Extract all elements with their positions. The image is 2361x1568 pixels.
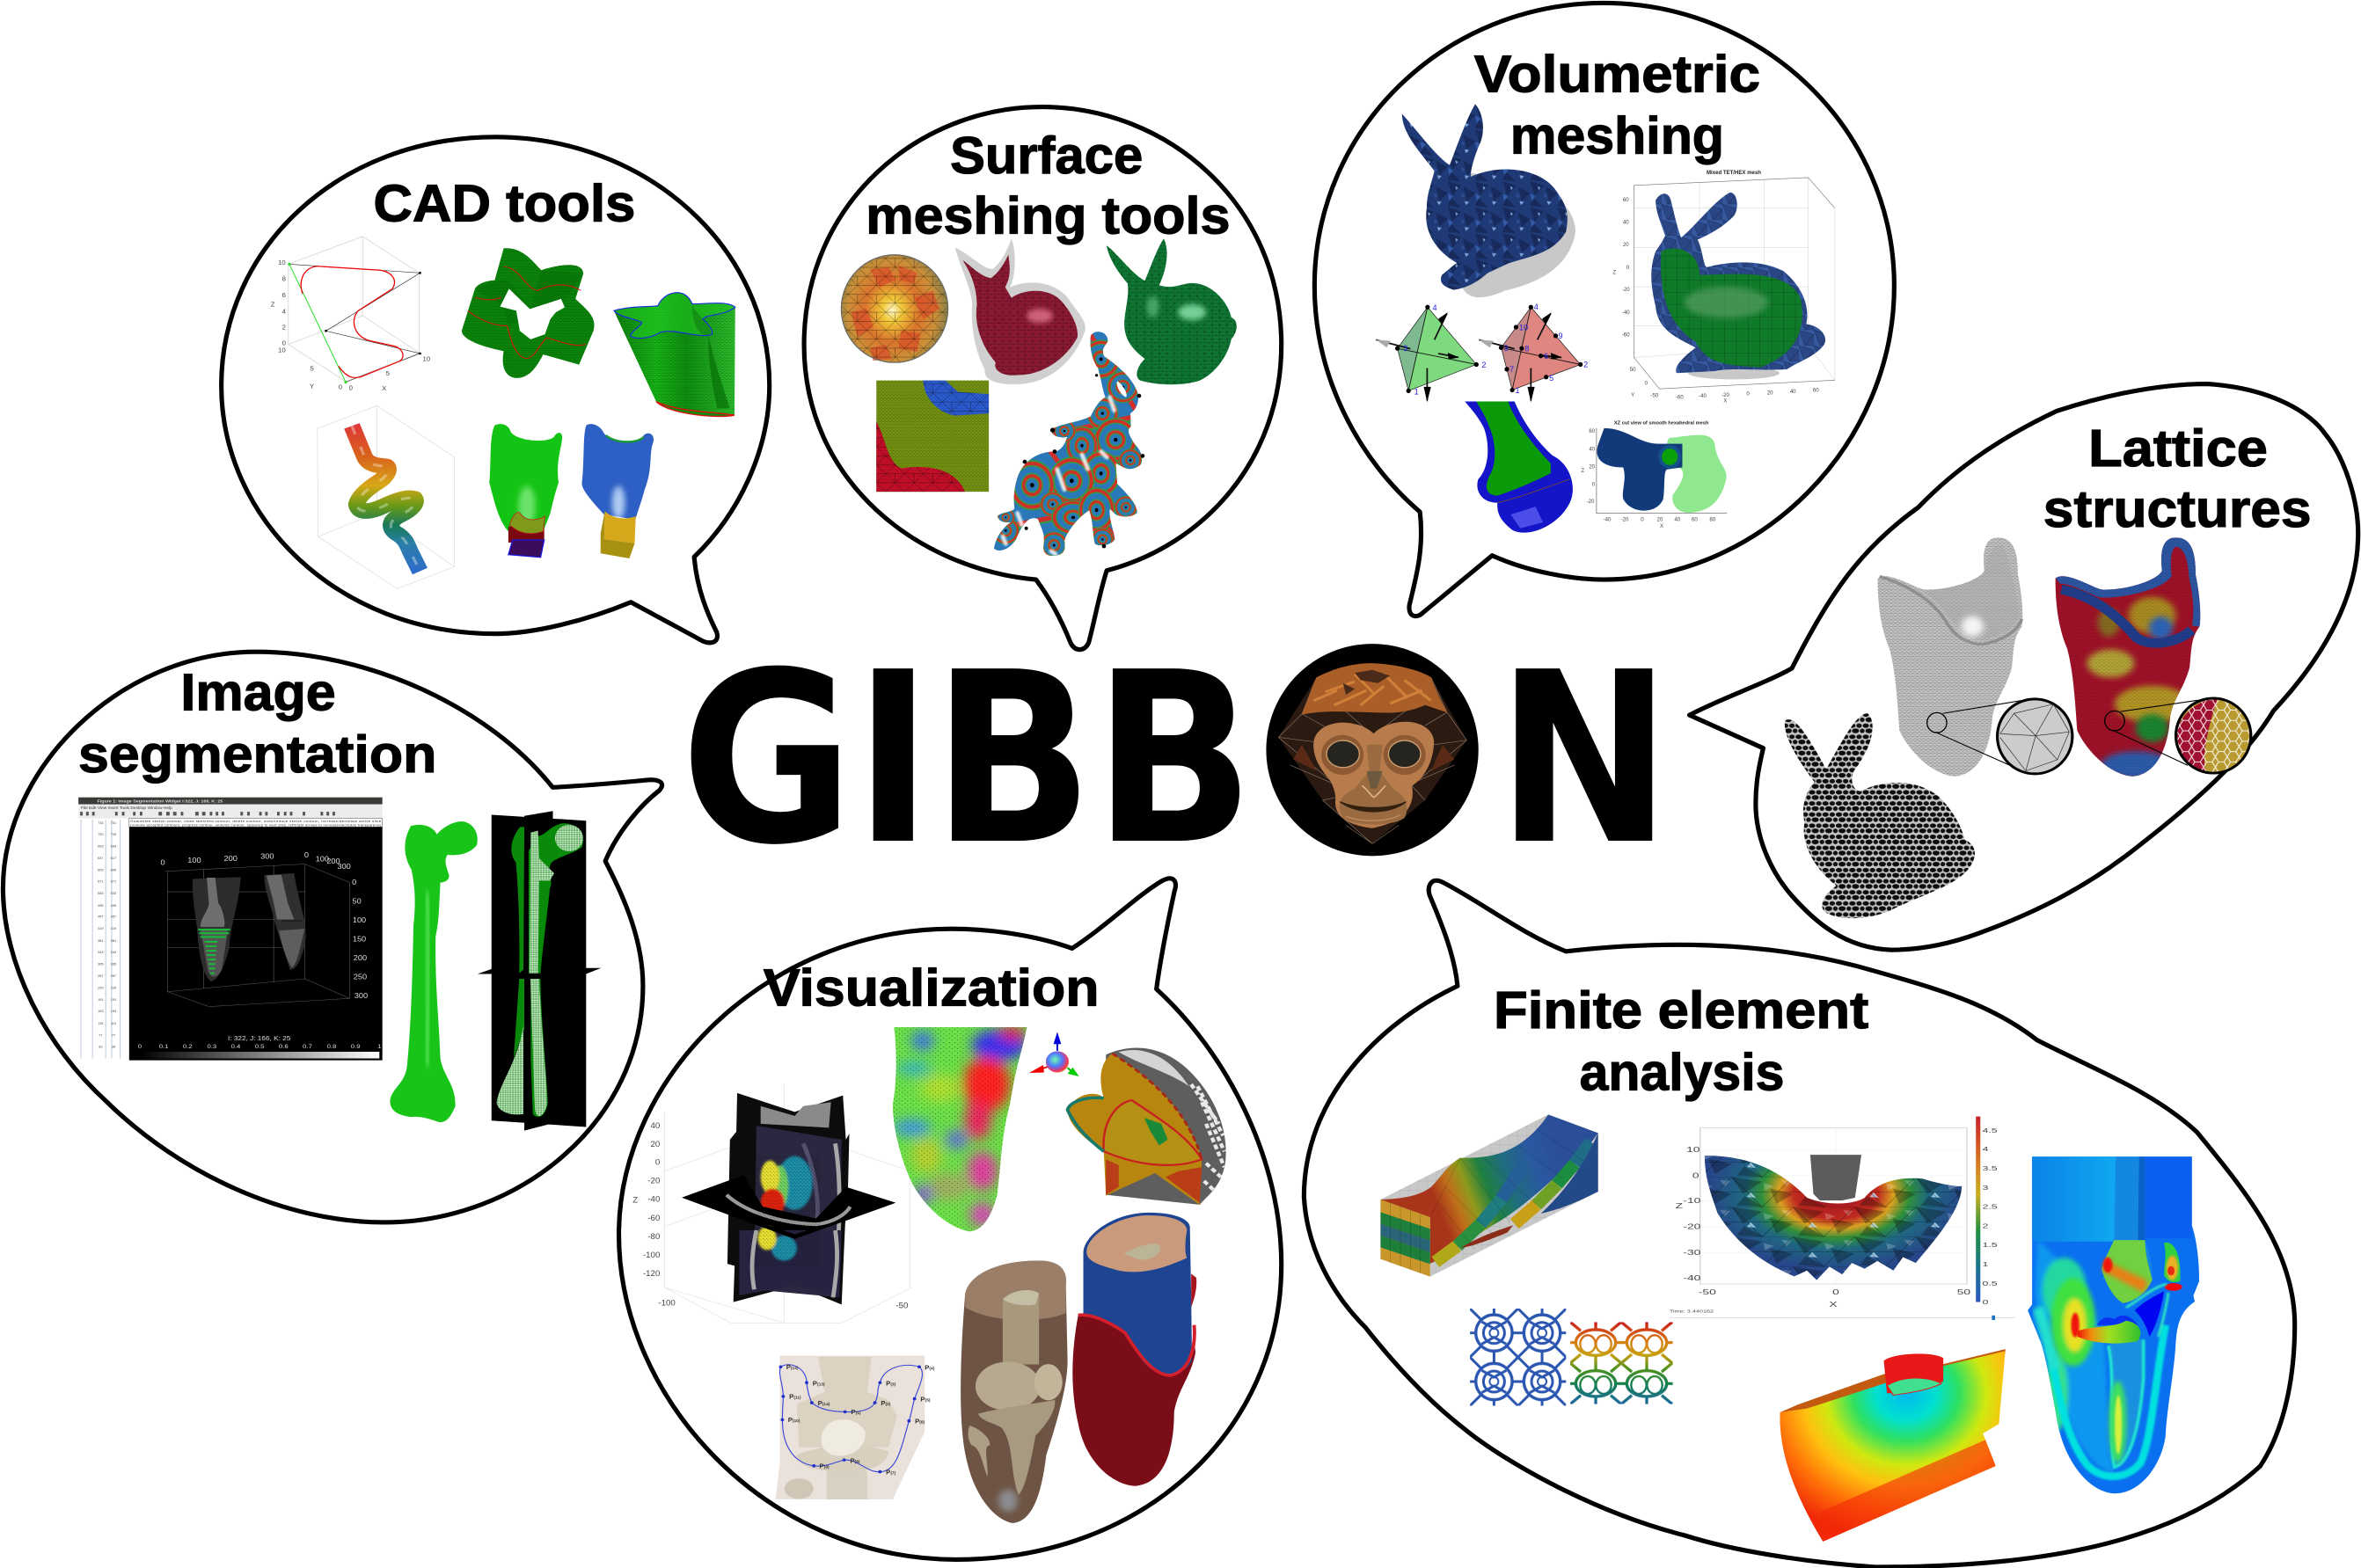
chart: Mixed TET/HEX mesh: Mixed TET/HEX mesh	[1707, 170, 1761, 176]
icon: hexahedral femur cut	[1465, 401, 1573, 533]
icon: ring-textured elephant	[994, 332, 1145, 556]
icon: knee with spline curve: P(13)	[813, 1380, 825, 1387]
icon: green linear tetrahedron: 1	[1414, 387, 1419, 396]
chart: image segmentation widget window: 0	[304, 850, 309, 859]
chart: XZ cut view of smooth hexahedral mesh: -40	[1604, 517, 1612, 523]
icon: red quadratic tetrahedron: 9	[1559, 332, 1563, 340]
chart: image segmentation widget window: 39	[99, 1046, 103, 1049]
segmentation illustrations	[78, 798, 601, 1131]
chart: MRI slices with vector field: Z	[632, 1196, 638, 1205]
chart: indentation colour plot: -20	[1683, 1223, 1700, 1231]
icon: multi-region 2D mesh	[876, 381, 989, 492]
chart: image segmentation widget window: 0	[352, 879, 356, 886]
chart: indentation colour plot: 2.5	[1982, 1204, 1998, 1211]
icon: knee with spline curve: P(14)	[818, 1399, 830, 1407]
chart: image segmentation widget window: 733	[98, 821, 104, 825]
chart: indentation colour plot: 1	[1982, 1261, 1989, 1268]
icon: limb with blue liner and red socket	[1072, 1213, 1196, 1486]
chart: image segmentation widget window: Figure 1: Image Segmentation Widget I:322, J: 166, K: 25	[97, 799, 223, 804]
chart: Bezier curve plot: 0	[349, 384, 353, 391]
chart: XZ cut view of smooth hexahedral mesh: X	[1660, 523, 1663, 529]
chart: image segmentation widget window: 0.3	[207, 1043, 216, 1050]
icon: green linear tetrahedron	[1376, 303, 1486, 402]
chart: indentation colour plot: -30	[1683, 1249, 1700, 1257]
volumetric illustrations	[1376, 104, 1835, 533]
chart: Mixed TET/HEX mesh: -20	[1721, 392, 1729, 398]
chart: image segmentation widget window: 0.7	[303, 1043, 312, 1050]
chart: image segmentation widget window: 229	[111, 987, 116, 989]
chart: image segmentation widget window: 100	[353, 916, 366, 924]
icon: knee with spline curve: P(3)	[886, 1380, 896, 1387]
chart: image segmentation widget window: 0.1	[159, 1043, 168, 1050]
icon: green linear tetrahedron: 3	[1403, 344, 1407, 353]
chart: Mixed TET/HEX mesh: -50	[1650, 392, 1659, 399]
icon: coloured gyroid lattice	[1570, 1322, 1673, 1404]
chart: image segmentation widget window: 115	[111, 1022, 116, 1025]
chart: Bezier curve plot: 6	[282, 291, 286, 299]
icon: knee with spline curve: P(9)	[820, 1462, 830, 1470]
chart: image segmentation widget window: 305	[98, 963, 104, 966]
heading: segmentation: segmentation	[78, 726, 436, 784]
chart: Mixed TET/HEX mesh: -40	[1699, 393, 1707, 399]
heading: Image: Image	[180, 663, 336, 721]
chart: Mixed TET/HEX mesh: 40	[1623, 220, 1629, 226]
chart: image segmentation widget window: Guarantee sketch contour, close sketched contour, delete contour, undo/reduce sketch contour, increase/decrease active slice	[130, 820, 381, 823]
chart: Bezier curve plot: 5	[386, 369, 390, 377]
heading: meshing: meshing	[1510, 107, 1724, 165]
chart: Bezier curve plot: 10	[423, 355, 430, 363]
chart: XZ cut view of smooth hexahedral mesh: 40	[1589, 446, 1596, 452]
chart: image segmentation widget window: 300	[337, 863, 351, 871]
icon: coloured limb with vector orientation	[888, 1025, 1079, 1235]
chart: Mixed TET/HEX mesh: 0	[1746, 391, 1750, 397]
surface meshing illustrations	[841, 238, 1237, 492]
chart: XZ cut view of smooth hexahedral mesh: 0	[1641, 517, 1644, 523]
icon: knee with spline curve: P(10)	[788, 1416, 800, 1424]
icon: knee with spline curve: P(8)	[850, 1457, 860, 1464]
chart: image segmentation widget window: 50	[352, 897, 362, 905]
icon: femur cross-section in image planes	[478, 811, 601, 1131]
chart: Mixed TET/HEX mesh: 60	[1623, 197, 1629, 203]
CAD illustrations	[271, 237, 735, 588]
icon: zoom callout grey	[1927, 699, 2072, 774]
chart: image segmentation widget window: 0	[138, 1043, 142, 1050]
chart: XZ cut view of smooth hexahedral mesh	[1581, 420, 1727, 529]
chart: Bezier curve plot: 0	[282, 339, 286, 347]
icon: knee with spline curve: P(11)	[789, 1393, 801, 1401]
chart: image segmentation widget window: 150	[353, 935, 366, 943]
chart: Mixed TET/HEX mesh: -40	[1622, 310, 1630, 316]
chart: image segmentation widget window: I: 322, J: 166, K: 25	[228, 1034, 290, 1042]
panel: CAD tools	[222, 137, 770, 643]
logo letters: GIBB: GIBB	[681, 623, 1254, 897]
chart: indentation colour plot: X	[1829, 1301, 1838, 1309]
icon: red quadratic tetrahedron: 4	[1534, 303, 1539, 311]
chart: image segmentation widget window: 0.4	[231, 1043, 240, 1050]
chart: MRI slices with vector field: -40	[647, 1195, 660, 1204]
chart: Mixed TET/HEX mesh: Z	[1612, 269, 1616, 275]
icon: green bunny mesh	[1107, 238, 1237, 384]
chart: image segmentation widget window: 0.5	[255, 1043, 265, 1050]
chart: image segmentation widget window: 609	[111, 869, 116, 872]
icon: green extruded star	[462, 248, 594, 378]
chart: image segmentation widget window: 200	[354, 954, 367, 962]
heading: meshing tools: meshing tools	[866, 186, 1230, 244]
chart: Mixed TET/HEX mesh: 20	[1623, 242, 1629, 248]
icon: knee with spline curve: P(7)	[886, 1469, 896, 1477]
heading: analysis: analysis	[1580, 1043, 1784, 1101]
heading: Finite element: Finite element	[1494, 981, 1868, 1039]
icon: rainbow swept tube	[318, 405, 455, 588]
panel: Image segmentation	[3, 652, 662, 1222]
icon: orientation triad	[1029, 1032, 1079, 1076]
chart: image segmentation widget window: 457	[98, 915, 104, 918]
chart: MRI slices with vector field: -100	[643, 1251, 660, 1259]
chart: image segmentation widget window: 191	[111, 998, 116, 1002]
icon: Voronoi sphere	[841, 255, 948, 362]
chart: image segmentation widget window: 720	[98, 833, 104, 836]
chart: image segmentation widget window: 267	[111, 974, 116, 978]
chart: MRI slices with vector field: -60	[647, 1214, 660, 1222]
chart: image segmentation widget window: 250	[354, 973, 367, 981]
chart: XZ cut view of smooth hexahedral mesh: XZ cut view of smooth hexahedral mesh	[1614, 420, 1709, 426]
chart: XZ cut view of smooth hexahedral mesh: 40	[1674, 517, 1681, 523]
chart: XZ cut view of smooth hexahedral mesh: 60	[1692, 517, 1698, 523]
chart: Mixed TET/HEX mesh: 0	[1626, 265, 1630, 271]
logo letter: N: N	[1496, 623, 1671, 897]
chart: image segmentation widget window: 729	[111, 833, 116, 836]
chart: image segmentation widget window: 693	[98, 845, 104, 848]
icon: red quadratic tetrahedron: 3	[1504, 344, 1509, 353]
chart: Bezier curve plot: 10	[278, 259, 286, 266]
icon: brain tissue cut	[1068, 1047, 1226, 1205]
chart: image segmentation widget window: 100	[187, 857, 201, 864]
chart: indentation colour plot: Time: 3.440162	[1670, 1310, 1714, 1314]
chart: image segmentation widget window: File Edit View Insert Tools Desktop Window Help	[81, 806, 172, 810]
icon: red quadratic tetrahedron	[1479, 303, 1588, 402]
chart: image segmentation widget window: 153	[111, 1010, 116, 1013]
panel: Lattice structures	[1690, 384, 2358, 950]
panel: Visualization	[619, 879, 1282, 1559]
icon: zoom callout colour	[2105, 698, 2251, 773]
chart: image segmentation widget window: 533	[98, 892, 104, 895]
chart: image segmentation widget window: 200	[223, 855, 238, 863]
chart: indentation colour plot: 0	[1692, 1172, 1699, 1180]
chart: image segmentation widget window: 0.9	[351, 1043, 361, 1050]
chart: indentation colour plot: 50	[1957, 1289, 1970, 1296]
chart: image segmentation widget window: 701	[111, 821, 116, 825]
chart: indentation colour plot: 0	[1832, 1289, 1839, 1296]
chart: XZ cut view of smooth hexahedral mesh: 0	[1592, 481, 1596, 487]
chart: image segmentation widget window: 419	[111, 927, 116, 930]
icon: green femur	[390, 821, 478, 1122]
chart: XZ cut view of smooth hexahedral mesh: -20	[1587, 499, 1595, 505]
chart: Mixed TET/HEX mesh: -60	[1622, 332, 1630, 338]
visualization illustrations	[632, 1025, 1226, 1523]
deformed block and gyroid lattices	[1380, 1114, 1673, 1406]
heading: Visualization: Visualization	[764, 959, 1100, 1017]
chart: Bezier curve plot: 4	[282, 308, 286, 315]
icon: green linear tetrahedron: 4	[1432, 303, 1437, 312]
chart: indentation colour plot: 10	[1686, 1147, 1699, 1154]
panel: Surface meshing tools	[804, 107, 1282, 650]
icon: deformed block	[1380, 1114, 1598, 1277]
chart: indentation colour plot: 1.5	[1982, 1242, 1998, 1249]
chart: Bezier curve plot: X	[382, 384, 386, 392]
chart: Bezier curve plot: 8	[282, 275, 286, 282]
chart: image segmentation widget window	[78, 798, 383, 1061]
icon: knee with spline curve: P(2)	[881, 1399, 891, 1407]
chart: image segmentation widget window: 495	[111, 904, 116, 908]
icon: lattice bunny	[1785, 713, 1975, 918]
chart: indentation colour plot: 4	[1982, 1146, 1989, 1153]
icon: red quadratic tetrahedron: 7	[1509, 365, 1514, 374]
chart: Bezier curve plot: 5	[310, 365, 314, 372]
heading: Volumetric: Volumetric	[1474, 45, 1760, 103]
chart: MRI slices with vector field: -20	[647, 1177, 660, 1185]
chart: XZ cut view of smooth hexahedral mesh: 20	[1589, 463, 1596, 470]
chart: image segmentation widget window: 457	[111, 915, 116, 918]
icon: coloured limb heat map	[2050, 534, 2251, 782]
icon: blue gyroid lattice	[1470, 1309, 1566, 1406]
chart: image segmentation widget window: 39	[112, 1046, 115, 1049]
icon: contact block heat map	[1775, 1347, 2012, 1547]
icon: red quadratic tetrahedron: 8	[1524, 344, 1529, 353]
chart: image segmentation widget window: 343	[111, 951, 116, 954]
chart: image segmentation widget window: 617	[111, 857, 116, 860]
chart: indentation colour plot: -50	[1699, 1289, 1716, 1296]
chart: image segmentation widget window: 300	[260, 852, 274, 860]
chart: image segmentation widget window: 1	[377, 1043, 381, 1050]
chart: Mixed TET/HEX mesh: 20	[1767, 390, 1773, 396]
icon: tetrahedral blue bunny	[1402, 104, 1575, 297]
chart: image segmentation widget window: 495	[98, 904, 104, 908]
chart: indentation colour plot: 4.5	[1982, 1127, 1998, 1134]
chart: Mixed TET/HEX mesh: 50	[1630, 367, 1636, 373]
chart: indentation colour plot	[1670, 1117, 2015, 1320]
icon: green lofted funnel	[614, 293, 735, 416]
chart: indentation colour plot: 3.5	[1982, 1165, 1998, 1172]
heading: Lattice: Lattice	[2088, 419, 2268, 478]
chart: XZ cut view of smooth hexahedral mesh: Z	[1581, 468, 1584, 474]
panel: Finite element analysis	[1304, 880, 2295, 1567]
chart: image segmentation widget window: 381	[111, 939, 116, 943]
icon: red quadratic tetrahedron: 5	[1549, 374, 1553, 383]
chart: indentation colour plot: -10	[1683, 1198, 1700, 1205]
chart: Mixed TET/HEX mesh: -20	[1622, 287, 1630, 293]
chart: MRI slices with vector field: -100	[658, 1299, 676, 1307]
chart: indentation colour plot: 3	[1982, 1185, 1989, 1192]
chart: image segmentation widget window: 191	[98, 998, 104, 1002]
chart: Mixed TET/HEX mesh: X	[1723, 397, 1727, 404]
icon: red quadratic tetrahedron: 6	[1544, 352, 1548, 361]
chart: Mixed TET/HEX mesh: 40	[1790, 389, 1796, 395]
icon: gibbon face in O	[1266, 644, 1479, 856]
chart: MRI slices with vector field: 0	[655, 1158, 660, 1166]
chart: image segmentation widget window: 0	[161, 858, 165, 866]
heading: CAD tools: CAD tools	[374, 175, 635, 233]
chart: image segmentation widget window: 115	[98, 1022, 103, 1025]
icon: green residual limb with red cage	[489, 424, 562, 558]
chart: image segmentation widget window: 229	[98, 987, 104, 989]
chart: image segmentation widget window: 637	[98, 857, 104, 860]
chart: image segmentation widget window: 0.2	[183, 1043, 193, 1050]
icon: grey meshed limb	[1878, 537, 2072, 777]
icon: knee with spline curve	[776, 1356, 935, 1499]
icon: green linear tetrahedron: 2	[1481, 361, 1486, 369]
icon: knee with spline curve: P(12)	[786, 1363, 799, 1371]
chart: image segmentation widget window: 77	[112, 1034, 115, 1037]
chart: image segmentation widget window: 381	[98, 939, 104, 943]
chart: image segmentation widget window: 100	[316, 855, 329, 863]
chart: Bezier curve plot: Z	[271, 301, 275, 309]
chart: Bezier curve plot: 2	[282, 324, 286, 332]
chart: image segmentation widget window: 153	[98, 1010, 104, 1013]
icon: knee with spline curve: P(6)	[915, 1418, 925, 1425]
chart: image segmentation widget window: 571	[111, 880, 116, 883]
chart: MRI slices with vector field: 40	[651, 1121, 660, 1130]
chart: MRI slices with vector field: -50	[895, 1302, 908, 1309]
chart: image segmentation widget window: 200	[326, 857, 340, 865]
chart: MRI slices with vector field: -120	[643, 1269, 660, 1278]
chart: image segmentation widget window: 419	[98, 927, 104, 930]
chart: image segmentation widget window: 77	[99, 1034, 103, 1037]
chart: image segmentation widget window: 305	[111, 963, 116, 966]
chart: image segmentation widget window: 0.8	[327, 1043, 336, 1050]
chart: MRI slices with vector field	[632, 1084, 912, 1323]
icon: knee with spline curve: P(4)	[925, 1364, 935, 1371]
chart: indentation colour plot: 0	[1982, 1299, 1989, 1306]
chart: image segmentation widget window: 300	[355, 991, 368, 1000]
chart: image segmentation widget window: 609	[98, 869, 104, 872]
icon: red quadratic tetrahedron: 10	[1519, 323, 1528, 332]
icon: blue residual limb with yellow cube	[581, 424, 654, 558]
chart: Mixed TET/HEX mesh	[1612, 170, 1835, 404]
panel: Volumetric meshing	[1314, 3, 1894, 616]
logo: GIBBON	[681, 623, 1671, 897]
chart: MRI slices with vector field: 20	[651, 1140, 660, 1149]
chart: Mixed TET/HEX mesh: Y	[1631, 392, 1634, 398]
heading: Surface: Surface	[950, 127, 1143, 185]
chart: image segmentation widget window: 571	[98, 880, 104, 883]
chart: MRI slices with vector field: -80	[647, 1232, 660, 1241]
chart: Bezier curve plot: 10	[278, 346, 286, 354]
chart: XZ cut view of smooth hexahedral mesh: 80	[1709, 517, 1716, 523]
chart: image segmentation widget window: 693	[111, 845, 116, 848]
chart: Bezier curve plot: 0	[339, 383, 342, 391]
chart: XZ cut view of smooth hexahedral mesh: 60	[1589, 428, 1596, 434]
icon: knee with spline curve: P(1)	[851, 1408, 861, 1416]
chart: Mixed TET/HEX mesh: -60	[1676, 394, 1684, 400]
chart: indentation colour plot: 0.5	[1982, 1280, 1998, 1287]
FEA illustrations	[1670, 1117, 2015, 1547]
chart: image segmentation widget window: 343	[98, 951, 104, 954]
icon: knee with spline curve: P(5)	[920, 1396, 931, 1404]
chart: image segmentation widget window: promote accepted contours, progress contour, undo/do contour, space/up to next slice, left/right arrows to increase/decrease transparency	[130, 824, 381, 827]
chart: Bezier curve plot	[271, 237, 430, 392]
lattice illustrations	[1785, 534, 2251, 918]
chart: Bezier curve plot: Y	[310, 383, 314, 390]
chart: XZ cut view of smooth hexahedral mesh: 20	[1657, 517, 1663, 523]
chart: indentation colour plot: -40	[1683, 1275, 1700, 1282]
icon: transparent limb with bones	[961, 1261, 1068, 1523]
icon: red quadratic tetrahedron: 1	[1516, 386, 1520, 395]
chart: Mixed TET/HEX mesh: 60	[1813, 388, 1819, 394]
chart: indentation colour plot: 2	[1982, 1223, 1989, 1230]
chart: image segmentation widget window: 267	[98, 974, 104, 978]
chart: image segmentation widget window: 0.6	[279, 1043, 289, 1050]
chart: indentation colour plot: Z	[1676, 1203, 1683, 1210]
chart: image segmentation widget window: 533	[111, 892, 116, 895]
chart: Mixed TET/HEX mesh: 0	[1645, 381, 1648, 387]
icon: residual limb stress map	[2026, 1155, 2202, 1495]
chart: XZ cut view of smooth hexahedral mesh: -20	[1621, 517, 1629, 523]
icon: red quadratic tetrahedron: 2	[1583, 360, 1588, 369]
icon: red bunny with grey offset	[955, 238, 1085, 384]
heading: structures: structures	[2043, 480, 2312, 538]
